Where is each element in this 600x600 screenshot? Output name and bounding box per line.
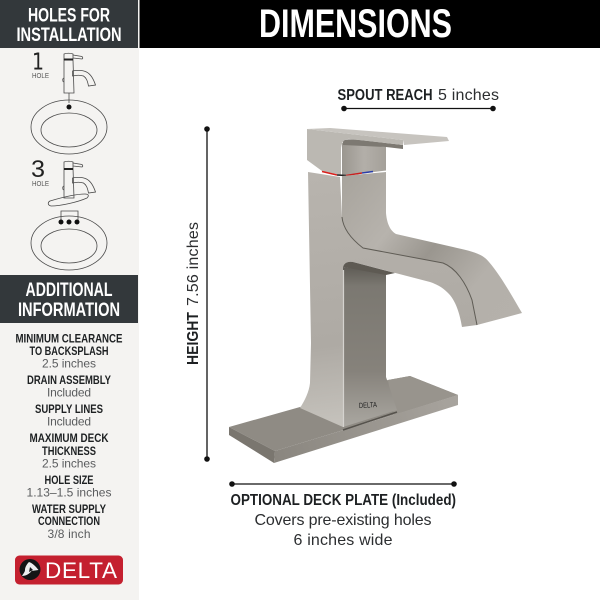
text block: additional information list: SUPPLY LINES (35, 404, 103, 416)
temperature ring (322, 172, 373, 176)
label: height: 7.56 inches (185, 222, 202, 306)
icon: one hole installation (31, 50, 107, 154)
body front (300, 172, 477, 427)
faucet illustration (229, 128, 522, 463)
label: spout reach: 5 inches (438, 87, 499, 104)
column highlight (342, 270, 344, 427)
text block: additional information list: HOLE SIZE (44, 475, 94, 487)
faucet logo text: DELTA (359, 400, 377, 410)
logo: Delta: DELTA (45, 558, 117, 583)
icon: one hole installation: 1 (32, 50, 44, 76)
text block: additional information list: 2.5 inches (42, 456, 96, 470)
panel: additional information heading: ADDITIONAL (26, 279, 113, 301)
left sidebar panel (0, 0, 139, 600)
label: optional deck plate: 6 inches wide (294, 532, 393, 549)
panel: holes for installation heading: INSTALLATION (16, 24, 122, 46)
text block: additional information list: 3/8 inch (48, 527, 90, 541)
text block: additional information list: THICKNESS (42, 446, 96, 458)
icon: three hole installation (31, 156, 107, 270)
text block: additional information list: DRAIN ASSEMBLY (27, 375, 111, 387)
label: optional deck plate (230, 492, 456, 549)
label: height: HEIGHT (185, 312, 202, 365)
top black banner (140, 0, 600, 48)
icon: three hole installation: 3 (31, 156, 45, 183)
panel: additional information heading: INFORMATION (18, 299, 120, 321)
arrow: spout reach dimension line (341, 106, 496, 111)
arrow: deck plate dimension line (229, 481, 457, 487)
text block: additional information list (16, 334, 123, 541)
icon: one hole installation: HOLE (32, 71, 49, 80)
text block: additional information list: Included (47, 414, 91, 428)
panel: additional information heading (0, 275, 138, 323)
text block: additional information list: Included (47, 386, 91, 400)
text block: additional information list: MAXIMUM DECK (30, 433, 109, 445)
panel: holes for installation heading: HOLES FOR (28, 4, 110, 26)
icon: three hole installation: HOLE (32, 179, 49, 188)
text block: additional information list: TO BACKSPLASH (30, 346, 108, 358)
spout side (342, 172, 522, 325)
text block: additional information list: 2.5 inches (42, 356, 96, 370)
spout underside shadow (343, 262, 395, 275)
label: spout reach: SPOUT REACH (338, 87, 432, 104)
spout crease line (342, 217, 477, 325)
title: DIMENSIONS (259, 2, 452, 46)
text block: additional information list: CONNECTION (38, 516, 100, 528)
arrow: height dimension line (204, 126, 210, 462)
label: optional deck plate: Covers pre-existing holes (254, 512, 432, 529)
text block: additional information list: 1.13–1.5 inches (26, 486, 112, 500)
logo: Delta (15, 556, 123, 584)
text block: additional information list: WATER SUPPLY (32, 504, 106, 516)
label: height (185, 222, 202, 365)
handle (307, 128, 449, 176)
text block: additional information list: MINIMUM CLEARANCE (16, 334, 123, 346)
lower column (343, 267, 397, 427)
panel: holes for installation heading (0, 0, 138, 48)
deck plate (229, 376, 458, 463)
label: optional deck plate: OPTIONAL DECK PLATE (Included) (230, 492, 456, 509)
